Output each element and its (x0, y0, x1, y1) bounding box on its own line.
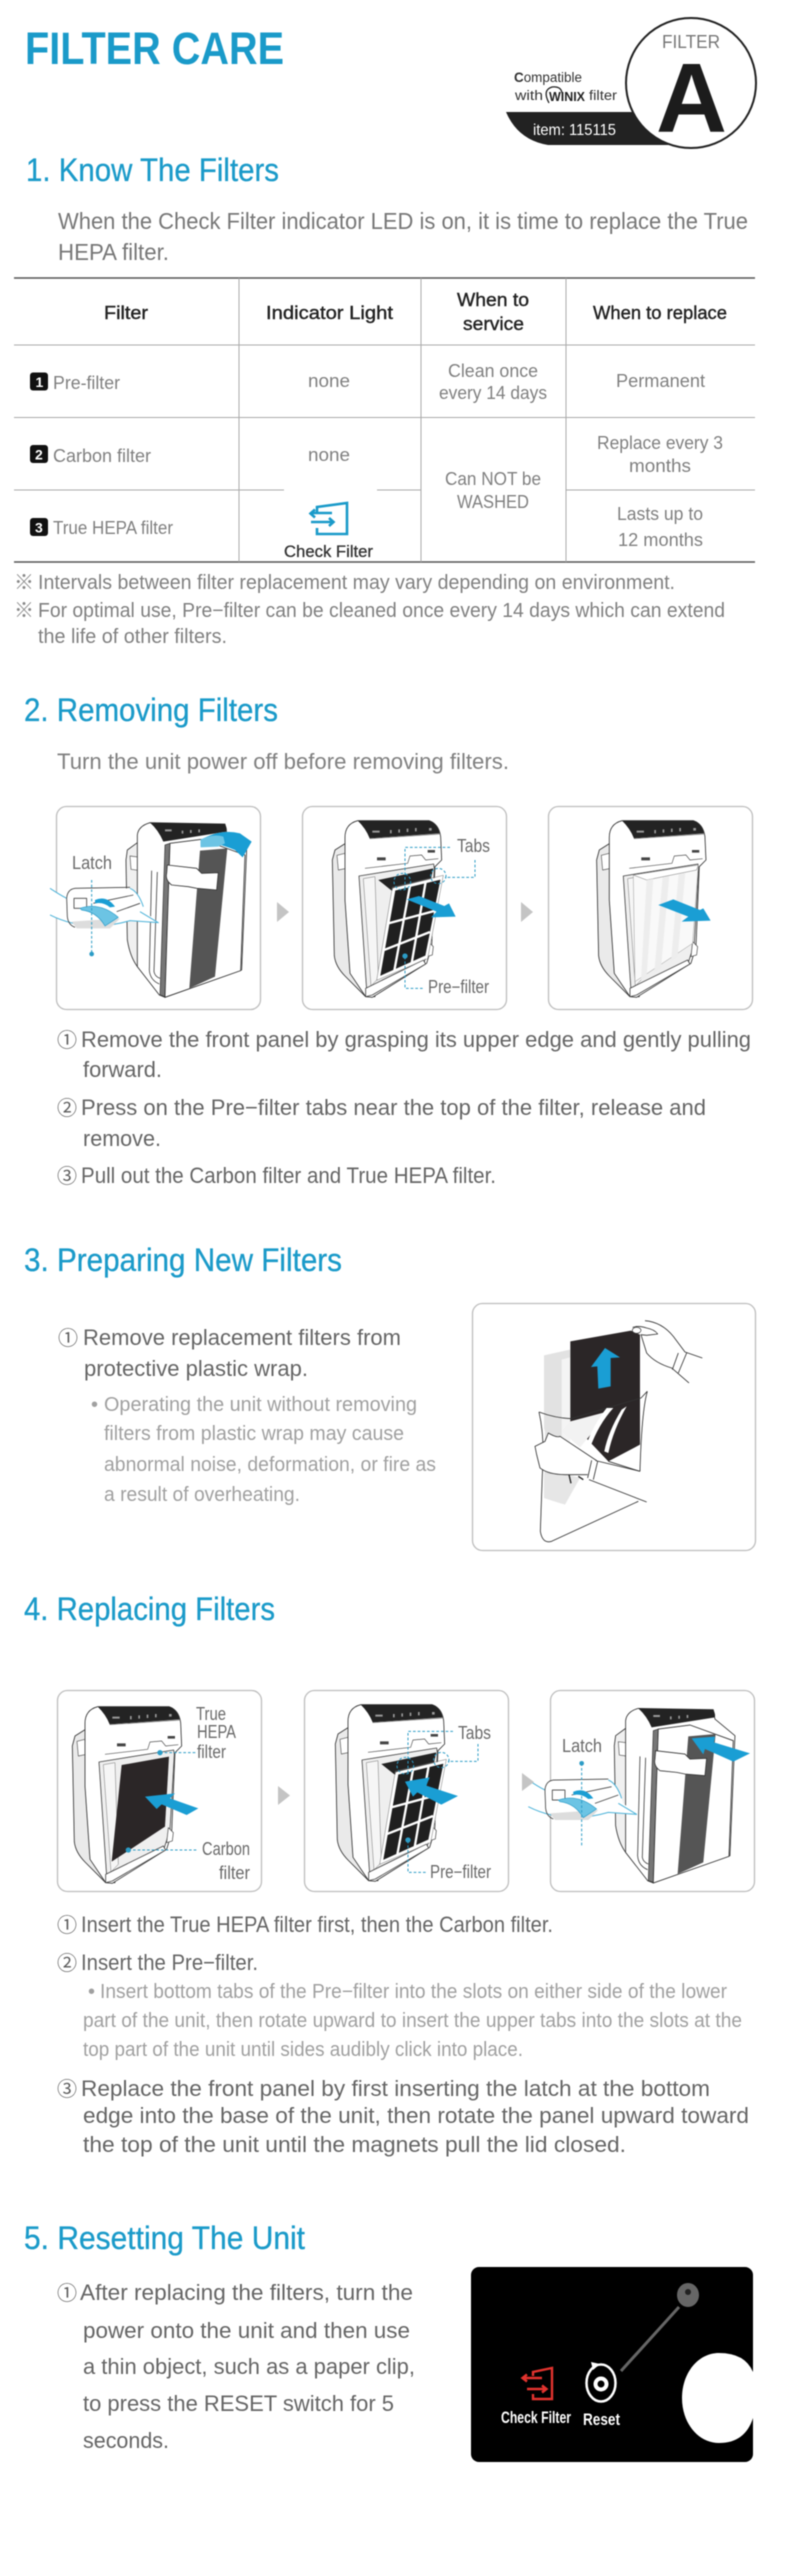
notes: the life of other filters. (38, 626, 227, 648)
row: pre-filter: none (308, 370, 350, 391)
text: remove plastic wrap: ① (58, 1322, 78, 1351)
label: true hepa filter: True (196, 1704, 226, 1724)
heading: know the filters: 1. Know The Filters (26, 152, 279, 188)
steps: replacing (57, 1909, 749, 2157)
illustration: unit with carbon filter (72, 1707, 182, 1883)
text: reset instructions: seconds. (83, 2428, 169, 2453)
compatible label: with (514, 88, 543, 103)
white circle (682, 2353, 753, 2443)
panel: unwrapping filter (472, 1304, 756, 1550)
steps: removing: ② (57, 1092, 77, 1121)
row: carbon filter: months (629, 455, 691, 476)
row: true hepa filter: True HEPA filter (53, 517, 173, 538)
row: pre-filter: Permanent (616, 370, 705, 391)
heading: resetting the unit: 5. Resetting The Unit (24, 2220, 305, 2256)
icon: paper clip pin (621, 2283, 699, 2371)
icon: check filter (310, 503, 347, 534)
table: filter schedule (14, 278, 755, 562)
steps: removing: ③ (57, 1160, 77, 1189)
illustration: arrow and leader (579, 1737, 750, 1847)
compatible label (514, 70, 618, 104)
text: remove plastic wrap (58, 1322, 436, 1506)
steps: removing: forward. (83, 1057, 162, 1082)
label: carbon filter: Carbon (202, 1839, 250, 1859)
arrow: step 2 to 3 (521, 902, 533, 922)
notes: ※ (14, 594, 34, 623)
heading: preparing new filters: 3. Preparing New Filters (24, 1242, 342, 1278)
text: reset instructions: to press the RESET switch for 5 (83, 2391, 394, 2416)
label: check filter: Check Filter (501, 2408, 571, 2427)
intro text: HEPA filter. (58, 239, 169, 265)
item number: item: 115115 (533, 122, 616, 139)
steps: replacing: Insert the Pre−filter. (81, 1950, 258, 1975)
row: carbon filter: WASHED (457, 491, 529, 512)
illustration: latch detail (528, 1779, 637, 1820)
illustration: hands and filter (535, 1321, 702, 1542)
icon: reset (586, 2362, 616, 2402)
row: pre-filter: Clean once (448, 360, 538, 381)
label: carbon filter (202, 1839, 250, 1883)
label: reset: Reset (583, 2410, 620, 2429)
heading: removing filters: 2. Removing Filters (24, 692, 278, 728)
steps: replacing: Insert the True HEPA filter first, then the Carbon filter. (81, 1912, 553, 1937)
row: pre-filter (30, 360, 705, 403)
row: pre-filter: Pre-filter (53, 372, 120, 393)
panel: reset switch (471, 2267, 753, 2462)
icon: red check filter (522, 2368, 552, 2399)
label: true hepa filter: HEPA (197, 1722, 236, 1742)
steps: removing: Remove the front panel by grasping its upper edge and gently pulling (81, 1027, 751, 1052)
panel: insert hepa and carbon (58, 1690, 262, 1892)
row: carbon filter: Carbon filter (53, 445, 151, 466)
arrow: replace step 2 to 3 (522, 1773, 534, 1791)
text: reset instructions: a thin object, such as a paper clip, (83, 2354, 415, 2379)
badge: compatible filter A (506, 18, 756, 153)
steps: removing: Press on the Pre−filter tabs near the top of the filter, release and (81, 1095, 706, 1120)
text: remove plastic wrap: abnormal noise, deformation, or fire as (104, 1454, 436, 1476)
row: true hepa filter: 12 months (618, 529, 703, 550)
compatible label: WINIX (549, 89, 585, 104)
steps: removing: Pull out the Carbon filter and True HEPA filter. (81, 1163, 496, 1188)
intro text (58, 208, 748, 265)
table header: When to (457, 289, 529, 310)
label: true hepa filter (196, 1704, 236, 1762)
panel: insert pre-filter (304, 1690, 508, 1892)
label: carbon filter: filter (219, 1863, 250, 1883)
steps: replacing: • (88, 1981, 95, 2003)
illustration: closing the door (614, 1708, 735, 1883)
steps: replacing: ② (57, 1947, 77, 1976)
steps: removing (57, 1024, 751, 1189)
text: remove plastic wrap: • (91, 1394, 98, 1416)
table header (104, 289, 727, 334)
steps: replacing: ① (57, 1909, 77, 1938)
steps: replacing: the top of the unit until the magnets pull the lid closed. (83, 2132, 626, 2157)
compatible label: filter (589, 88, 618, 103)
text: reset instructions: power onto the unit and then use (83, 2318, 410, 2343)
text: remove plastic wrap: protective plastic wrap. (84, 1356, 308, 1381)
text: remove plastic wrap: filters from plastic wrap may cause (104, 1423, 404, 1445)
text: remove plastic wrap: a result of overheating. (104, 1484, 300, 1506)
table header: Indicator Light (266, 302, 393, 323)
text: reset instructions: ① (57, 2277, 77, 2306)
panel: press pre-filter tabs (302, 806, 506, 1010)
notes: ※ (14, 566, 34, 595)
illustration: arrows and leaders (126, 1750, 198, 1853)
badge black band (506, 112, 680, 145)
row: pre-filter: 1 (36, 374, 44, 390)
table header: Filter (104, 302, 148, 323)
panel: pull out filters (548, 806, 752, 1010)
illustration: unit with pre-filter (332, 821, 475, 997)
intro text: When the Check Filter indicator LED is on, it is time to replace the True (58, 208, 748, 234)
label: pre-filter: Pre−filter (428, 977, 489, 997)
steps: removing: remove. (83, 1126, 161, 1151)
steps: replacing: edge into the base of the unit, then rotate the panel upward toward (83, 2103, 749, 2128)
illustration: unit with door (50, 823, 252, 997)
row: carbon filter: Replace every 3 (597, 432, 723, 453)
label: tabs: Tabs (458, 1723, 491, 1743)
row: carbon filter: none (308, 444, 350, 465)
row: pre-filter: every 14 days (439, 382, 547, 403)
arrow: replace step 1 to 2 (278, 1786, 290, 1805)
row: true hepa filter (30, 503, 703, 550)
label: pre-filter: Pre−filter (430, 1862, 491, 1882)
compatible label: Compatible (514, 70, 582, 85)
steps: replacing: part of the unit, then rotate upward to insert the upper tabs into the slots at the (83, 2010, 742, 2032)
notes: Intervals between filter replacement may vary depending on environment. (38, 572, 675, 594)
steps: removing: ① (57, 1024, 77, 1053)
steps: replacing: ③ (57, 2073, 77, 2102)
text: reset instructions: After replacing the filters, turn the (80, 2280, 413, 2305)
arrow: step 1 to 2 (277, 902, 289, 922)
text: remove plastic wrap: Remove replacement filters from (83, 1325, 401, 1350)
steps: replacing: Replace the front panel by first inserting the latch at the bottom (81, 2076, 710, 2101)
text: remove plastic wrap: Operating the unit without removing (104, 1394, 417, 1416)
row: carbon filter: Can NOT be (445, 468, 541, 489)
illustration: unit with hepa filter (597, 821, 711, 997)
text: reset instructions (57, 2277, 415, 2453)
notes (14, 566, 725, 648)
table header: service (463, 313, 524, 334)
illustration: unit with pre-filter installed (335, 1705, 478, 1881)
letter circle (626, 18, 756, 153)
heading: replacing filters: 4. Replacing Filters (24, 1591, 275, 1627)
panel: replace front panel (528, 1690, 754, 1892)
label: latch: Latch (72, 853, 112, 873)
label: true hepa filter: filter (197, 1742, 226, 1762)
label: latch: Latch (562, 1736, 602, 1756)
letter circle: A (656, 43, 727, 153)
steps: replacing: Insert bottom tabs of the Pre−filter into the slots on either side of the lower (100, 1981, 727, 2003)
notes: For optimal use, Pre−filter can be cleaned once every 14 days which can extend (38, 600, 725, 622)
row: true hepa filter: 3 (35, 520, 43, 536)
row: true hepa filter: Lasts up to (617, 503, 703, 524)
check filter label: Check Filter (284, 543, 373, 561)
table header: When to replace (593, 302, 727, 323)
steps: replacing: top part of the unit until sides audibly click into place. (83, 2039, 523, 2061)
letter circle: FILTER (662, 32, 720, 52)
title: FILTER CARE (25, 23, 284, 74)
row: carbon filter: 2 (35, 446, 43, 462)
row: carbon filter (30, 432, 723, 512)
panel: remove front panel (50, 806, 260, 1010)
label: tabs: Tabs (457, 836, 490, 856)
instruction: power off: Turn the unit power off before removing filters. (57, 749, 509, 774)
